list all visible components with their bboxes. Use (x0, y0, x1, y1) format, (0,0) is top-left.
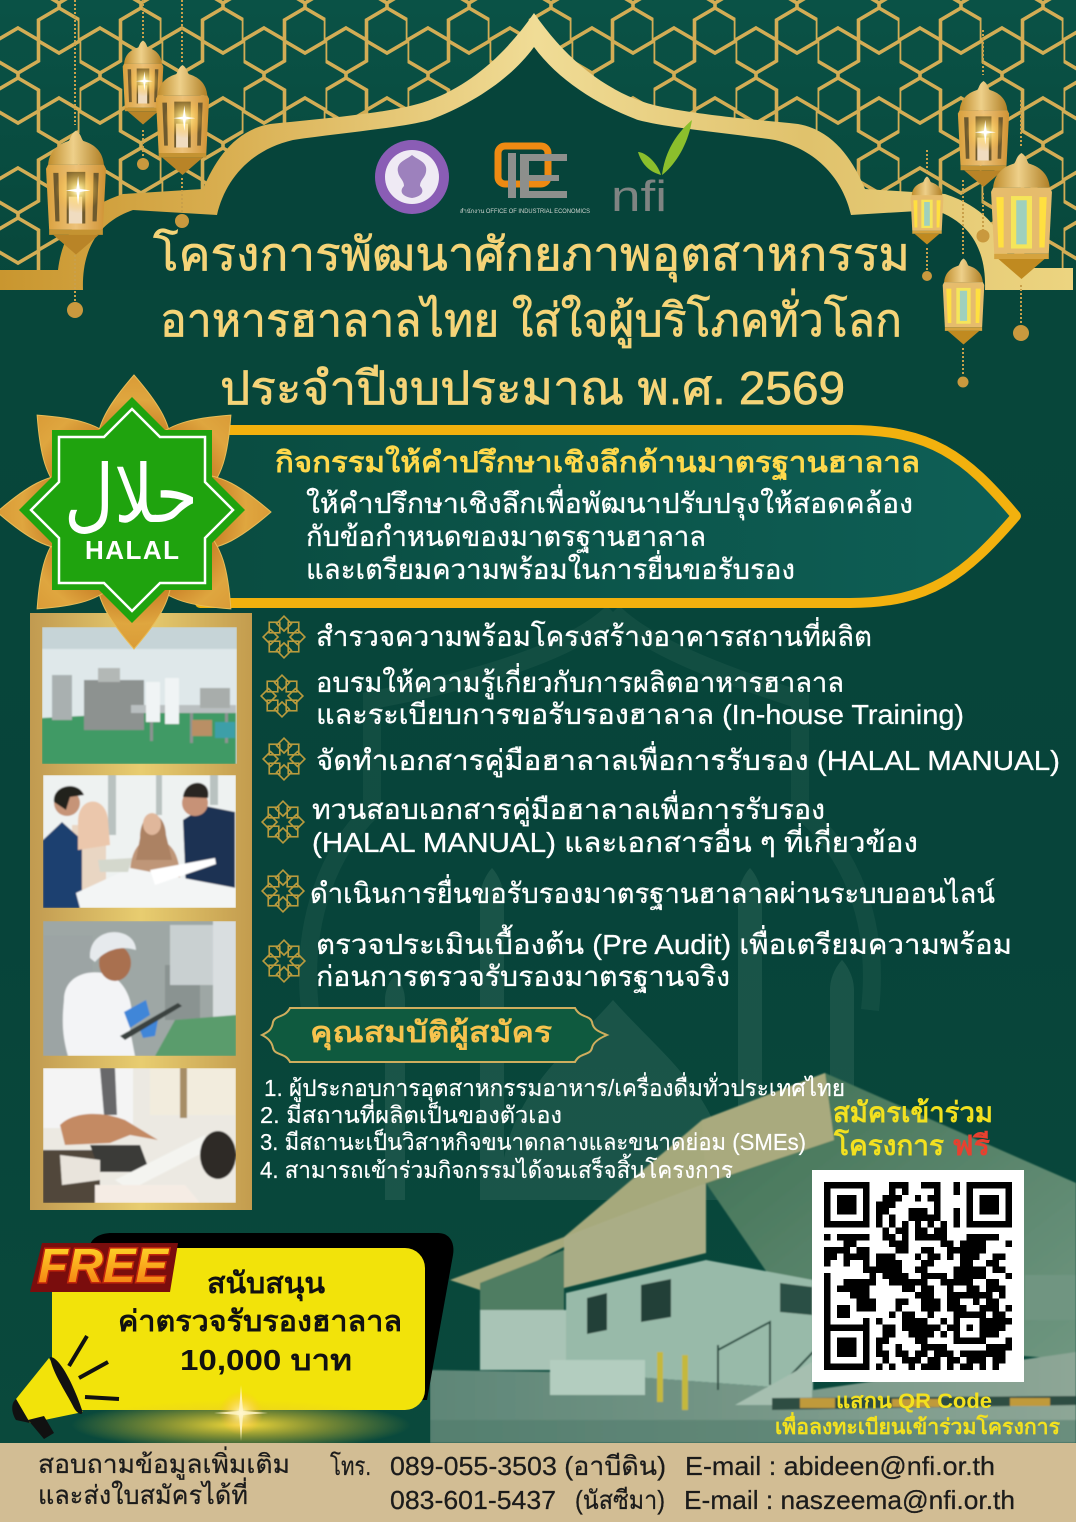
qualifications list: 4. สามารถเข้าร่วมกิจกรรมได้จนเสร็จสิ้นโครงการ (260, 1154, 733, 1183)
photo: inspector with clipboard (43, 921, 236, 1056)
logo: NFI: nfi (611, 172, 667, 221)
title: ประจำปีงบประมาณ พ.ศ. 2569 (220, 362, 845, 414)
logo: OIE (460, 146, 590, 215)
arabic halal word: حلال (64, 448, 198, 541)
banner body text (306, 484, 913, 585)
email addresses (684, 1451, 1015, 1515)
photo: production room (42, 627, 237, 764)
contact lead text: และส่งใบสมัครได้ที่ (38, 1477, 248, 1510)
apply free callout: ฟรี (952, 1130, 990, 1161)
activity list: ตรวจประเมินเบื้องต้น (Pre Audit) เพื่อเตรียมความพร้อม (316, 924, 1012, 960)
title: โครงการพัฒนาศักยภาพอุตสาหกรรม (153, 228, 910, 283)
email addresses: E-mail : naszeema@nfi.or.th (684, 1485, 1015, 1515)
activity list (310, 617, 1060, 993)
lanterns right (911, 30, 1052, 388)
banner body text: และเตรียมความพร้อมในการยื่นขอรับรอง (306, 550, 795, 585)
photo frame column (30, 613, 252, 1210)
logo: NFI (611, 120, 692, 221)
green star (19, 397, 245, 623)
activity list: อบรมให้ความรู้เกี่ยวกับการผลิตอาหารฮาลาล (316, 663, 844, 700)
qualifications list: 3. มีสถานะเป็นวิสาหกิจขนาดกลางและขนาดย่อม (SMEs) (260, 1127, 806, 1155)
phone numbers: (นัสซีมา) (575, 1485, 665, 1515)
qr code (812, 1170, 1024, 1382)
activity list: (HALAL MANUAL) และเอกสารอื่น ๆ ที่เกี่ยวข้อง (312, 823, 918, 858)
qualifications list: 1. ผู้ประกอบการอุตสาหกรรมอาหาร/เครื่องดื่มทั่วประเทศไทย (264, 1072, 845, 1102)
title (153, 228, 910, 414)
glow effect (71, 1385, 411, 1450)
support text: สนับสนุน (207, 1268, 325, 1301)
qr caption: แสกน QR Code (836, 1390, 992, 1413)
support text: 10,000 บาท (180, 1345, 352, 1377)
contact footer (0, 1443, 1076, 1522)
photo: business meeting (43, 775, 236, 908)
activity list: และระเบียบการขอรับรองฮาลาล (In-house Training) (316, 699, 964, 730)
qr caption (775, 1390, 1061, 1439)
contact lead text (38, 1446, 290, 1510)
qualifications heading: คุณสมบัติผู้สมัคร (310, 1017, 552, 1050)
apply free callout (833, 1097, 993, 1161)
lanterns left (46, 0, 209, 318)
qualifications list: 2. มีสถานที่ผลิตเป็นของตัวเอง (260, 1099, 562, 1128)
qualifications list (260, 1072, 845, 1183)
free badge: FREE (38, 1240, 170, 1293)
phone numbers: 089-055-3503 (อาบีดิน) (390, 1451, 666, 1481)
apply free callout: สมัครเข้าร่วม (833, 1097, 993, 1128)
support callout (30, 1233, 453, 1410)
icon: megaphone (12, 1336, 119, 1439)
phone numbers: 083-601-5437 (390, 1485, 556, 1515)
qualifications heading (262, 1008, 607, 1062)
factory photo (430, 1073, 1076, 1443)
title: อาหารฮาลาลไทย ใส่ใจผู้บริโภคทั่วโลก (160, 288, 902, 348)
banner heading: กิจกรรมให้คำปรึกษาเชิงลึกด้านมาตรฐานฮาลาล (275, 445, 920, 481)
activity list: จัดทำเอกสารคู่มือฮาลาลเพื่อการรับรอง (HALAL MANUAL) (316, 741, 1060, 778)
activity list: สำรวจความพร้อมโครงสร้างอาคารสถานที่ผลิต (316, 617, 872, 652)
banner panel: consultation activity (200, 430, 1016, 603)
arch band (0, 13, 1073, 290)
apply free callout: โครงการ (833, 1128, 944, 1161)
support text: ค่าตรวจรับรองฮาลาล (118, 1306, 402, 1338)
activity list: ดำเนินการยื่นขอรับรองมาตรฐานฮาลาลผ่านระบบออนไลน์ (310, 874, 995, 910)
halal badge (0, 375, 271, 649)
qr caption: เพื่อลงทะเบียนเข้าร่วมโครงการ (775, 1411, 1061, 1439)
phone numbers: โทร. (330, 1451, 371, 1481)
email addresses: E-mail : abideen@nfi.or.th (685, 1451, 995, 1481)
banner body text: ให้คำปรึกษาเชิงลึกเพื่อพัฒนาปรับปรุงให้สอดคล้อง (306, 484, 913, 521)
logo: OIE: สำนักงาน OFFICE OF INDUSTRIAL ECONOMICS (460, 208, 590, 215)
support text (118, 1268, 402, 1377)
icons: list rosettes (261, 616, 305, 982)
photo: hand on tablet (43, 1068, 236, 1203)
banner body text: กับข้อกำหนดของมาตรฐานฮาลาล (306, 521, 706, 553)
activity list: ก่อนการตรวจรับรองมาตรฐานจริง (316, 961, 730, 993)
gold lattice pattern header (0, 0, 1076, 275)
activity list: ทวนสอบเอกสารคู่มือฮาลาลเพื่อการรับรอง (312, 790, 825, 827)
logo: ministry of industry (375, 140, 449, 214)
phone numbers (330, 1451, 666, 1515)
contact lead text: สอบถามข้อมูลเพิ่มเติม (38, 1446, 290, 1480)
halal label: HALAL (85, 535, 179, 565)
background pattern: faint mosque silhouette (308, 612, 872, 1200)
